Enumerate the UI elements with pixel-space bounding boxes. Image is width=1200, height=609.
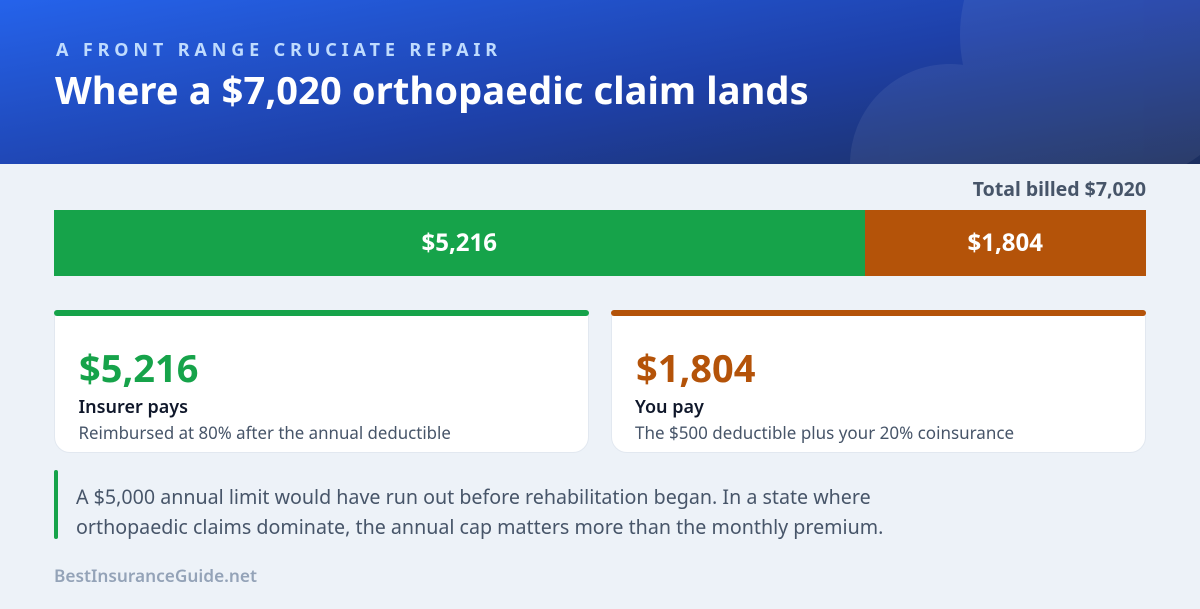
label: You pay (635, 395, 704, 419)
amount: $5,216 (79, 342, 199, 394)
accent bar (611, 310, 1146, 316)
panel: insurer pays (54, 310, 589, 453)
you pay segment (864, 210, 1146, 276)
eyebrow: A FRONT RANGE CRUCIATE REPAIR (56, 38, 502, 62)
title: Where a $7,020 orthopaedic claim lands (55, 64, 809, 116)
amount: $1,804 (636, 342, 756, 394)
panel: you pay (611, 310, 1146, 453)
card body (611, 313, 1146, 453)
label: Insurer pays (78, 395, 188, 419)
description: Reimbursed at 80% after the annual deductible (78, 421, 451, 444)
callout text (76, 483, 883, 540)
insurer segment (54, 210, 864, 276)
decorative circles (850, 0, 1200, 164)
accent bar (54, 310, 589, 316)
you pay segment: $1,804 (968, 226, 1043, 259)
card body (54, 313, 589, 453)
description: The $500 deductible plus your 20% coinsurance (635, 421, 1014, 444)
stacked bar (54, 210, 1146, 276)
total billed label: Total billed $7,020 (973, 175, 1146, 202)
header banner (0, 0, 1200, 164)
footer brand: BestInsuranceGuide.net (54, 565, 257, 588)
callout text: A $5,000 annual limit would have run out before rehabilitation began. In a state where (76, 483, 871, 510)
insurer segment: $5,216 (422, 226, 497, 259)
callout accent bar (54, 470, 58, 539)
callout text: orthopaedic claims dominate, the annual cap matters more than the monthly premium. (76, 513, 883, 540)
